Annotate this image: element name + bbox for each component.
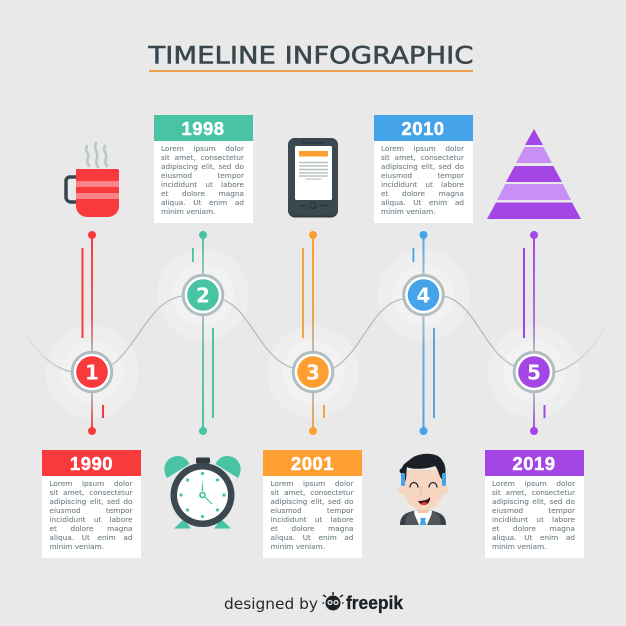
card: 1998: incididunt ut labore xyxy=(161,180,244,189)
card: 2019: Lorem ipsum dolor xyxy=(492,479,575,488)
card: 1998: 1998 xyxy=(181,118,225,139)
card: 1990: incididunt ut labore xyxy=(50,515,132,524)
card: 2001: adipiscing elit, sed do xyxy=(270,497,354,506)
node 5 xyxy=(488,231,580,435)
card: 1998: aliqua. Ut enim ad xyxy=(161,198,244,207)
card: 2019: 2019 xyxy=(512,453,556,474)
card: 2010: sit amet, consectetur xyxy=(381,153,464,162)
card: 1990: adipiscing elit, sed do xyxy=(50,497,132,506)
icon: coffee mug xyxy=(66,143,119,217)
node 1 xyxy=(46,231,138,435)
card: 1998: minim veniam. xyxy=(161,207,216,216)
card: 2019 xyxy=(484,450,584,558)
icon: smartphone xyxy=(288,138,338,218)
card: 1990: 1990 xyxy=(70,453,113,474)
card: 2010: eiusmod tempor xyxy=(381,171,464,180)
node 3: 3 xyxy=(306,360,320,384)
card: 2010: aliqua. Ut enim ad xyxy=(381,198,464,207)
card: 2019: aliqua. Ut enim ad xyxy=(492,533,575,542)
card: 2010: Lorem ipsum dolor xyxy=(381,144,464,153)
card: 1990: et dolore magna xyxy=(50,524,132,533)
credit: designed by freepik: designed by xyxy=(224,595,318,613)
card: 2001: minim veniam. xyxy=(270,542,325,551)
card: 1998: sit amet, consectetur xyxy=(161,153,244,162)
card: 2010: adipiscing elit, sed do xyxy=(381,162,464,171)
card: 2001: 2001 xyxy=(291,453,334,474)
card: 2019: incididunt ut labore xyxy=(492,515,575,524)
icon: pyramid xyxy=(487,129,581,219)
card: 1998: Lorem ipsum dolor xyxy=(161,144,244,153)
card: 2019: eiusmod tempor xyxy=(492,506,575,515)
card: 2010: minim veniam. xyxy=(381,207,436,216)
title: TIMELINE INFOGRAPHIC xyxy=(147,42,474,70)
card: 2001: Lorem ipsum dolor xyxy=(270,479,354,488)
card: 2001: aliqua. Ut enim ad xyxy=(270,533,354,542)
credit: designed by freepik xyxy=(224,592,404,613)
timeline curve xyxy=(18,296,612,372)
credit: designed by freepik: freepik xyxy=(346,593,404,613)
card: 1998: eiusmod tempor xyxy=(161,171,244,180)
card: 2010: 2010 xyxy=(401,118,445,139)
icon: alarm clock xyxy=(164,456,241,528)
card: 1998 xyxy=(154,115,252,223)
node 4: 4 xyxy=(417,284,430,308)
card: 1990: eiusmod tempor xyxy=(50,506,132,515)
card: 2019: sit amet, consectetur xyxy=(492,488,575,497)
icon: smiling man xyxy=(398,454,449,525)
card: 1998: adipiscing elit, sed do xyxy=(161,162,244,171)
card: 2010: incididunt ut labore xyxy=(381,180,464,189)
card: 2010 xyxy=(374,115,472,223)
card: 1990 xyxy=(42,450,141,558)
node 1: 1 xyxy=(85,360,99,384)
card: 1990: Lorem ipsum dolor xyxy=(50,479,132,488)
card: 1990: aliqua. Ut enim ad xyxy=(50,533,132,542)
card: 2001: sit amet, consectetur xyxy=(270,488,354,497)
card: 2019: minim veniam. xyxy=(492,542,547,551)
card: 1990: sit amet, consectetur xyxy=(50,488,132,497)
node 2: 2 xyxy=(196,284,210,308)
card: 2001: eiusmod tempor xyxy=(270,506,354,515)
card: 2010: et dolore magna xyxy=(381,189,464,198)
node 2 xyxy=(157,231,249,435)
card: 2001: et dolore magna xyxy=(270,524,354,533)
node 3 xyxy=(267,231,359,435)
card: 1990: minim veniam. xyxy=(50,542,104,551)
card: 2001 xyxy=(263,450,362,558)
node 5: 5 xyxy=(527,360,541,384)
card: 2019: et dolore magna xyxy=(492,524,575,533)
node 4 xyxy=(378,231,470,435)
card: 2019: adipiscing elit, sed do xyxy=(492,497,575,506)
card: 2001: incididunt ut labore xyxy=(270,515,354,524)
card: 1998: et dolore magna xyxy=(161,189,244,198)
